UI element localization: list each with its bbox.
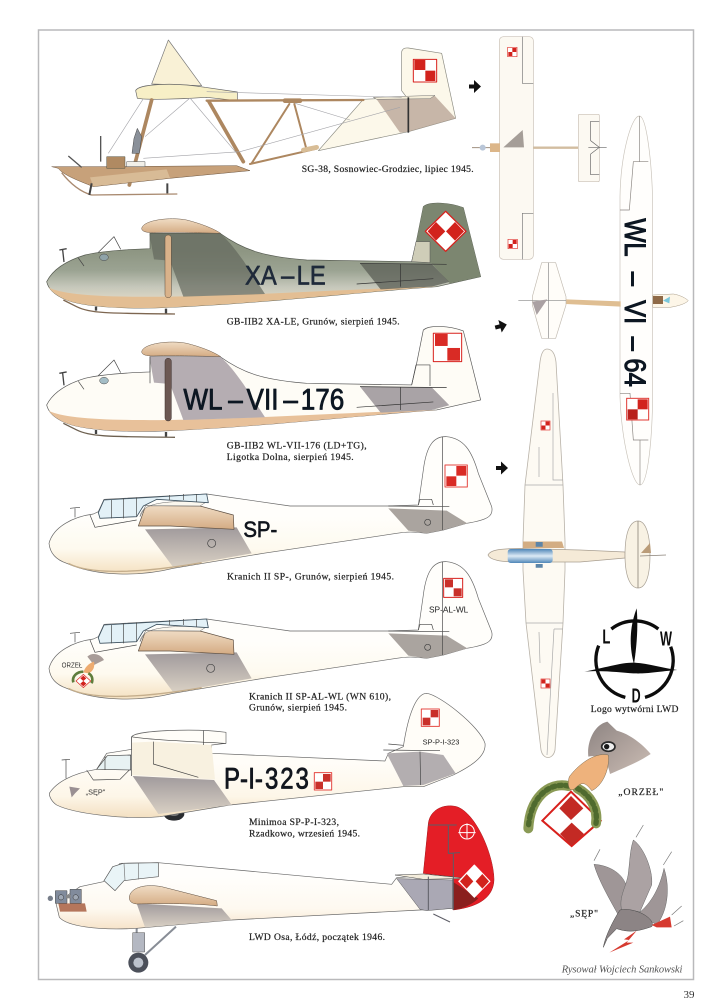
registration: 323 [265, 761, 309, 795]
tailplane [625, 521, 650, 588]
aircraft: SG-38 side view [52, 40, 456, 195]
engine [48, 889, 81, 903]
nose emblem ORZEŁ: ORZEŁ [62, 661, 82, 670]
shadow under wing [137, 903, 232, 927]
fuselage [56, 863, 453, 929]
wing strut [165, 235, 171, 298]
credit: Rysował Wojciech Sankowski [561, 965, 682, 976]
tailplane [518, 263, 566, 338]
arrow 2 [494, 318, 508, 334]
canopy [97, 755, 131, 770]
caption: Kranich II SP-AL-WL: Grunów, sierpień 1945. [249, 703, 347, 714]
plan view: SG-38 [472, 37, 607, 259]
roundel lower [541, 679, 550, 688]
keel [68, 563, 202, 571]
cockpit [653, 296, 670, 304]
registration: – [619, 272, 652, 287]
tail shadow [360, 387, 449, 413]
logo: LWD: W [660, 629, 672, 651]
rudder [638, 521, 666, 588]
fin registration: SP-P-I-323 [423, 738, 459, 747]
canopy [104, 863, 158, 891]
registration: 64 [619, 358, 652, 387]
caption: Minimoa SP-P-I-323 [249, 817, 360, 840]
wing top [132, 742, 215, 779]
registration: SP- [243, 517, 277, 542]
landing gear [128, 910, 176, 973]
roundel upper [541, 421, 550, 430]
roundels [508, 47, 517, 249]
registration: – [228, 383, 243, 416]
registration: – [619, 337, 652, 352]
roundel on fin [413, 59, 437, 82]
wing [620, 116, 653, 485]
aircraft: Minimoa SP-P-I-323 [49, 693, 485, 821]
aircraft: Kranich II SP-AL-WL [49, 562, 492, 699]
nose [472, 143, 500, 152]
wing root [138, 506, 234, 529]
body and head [603, 909, 652, 947]
plan view: Kranich II [488, 349, 666, 758]
pylon [152, 40, 202, 86]
aileron lines [620, 116, 648, 485]
roundel diamond [459, 865, 490, 897]
wreath [528, 785, 596, 828]
caption: GB-IIB2 XA-LE: GB-IIB2 XA-LE, Grunów, sierpień 1945. [227, 316, 400, 328]
nose emblem ORZEŁ [62, 654, 104, 688]
fuselage [488, 548, 625, 562]
arrow 3 [496, 462, 508, 474]
canopy frames [124, 863, 138, 881]
shadow under wing [145, 527, 252, 567]
caption: GB-IIB2 WL-VII-176: GB-IIB2 WL-VII-176 (LD+TG), [227, 440, 367, 451]
fuselage and fin [49, 437, 492, 574]
fin upper colour [412, 203, 481, 283]
shadow under wing [145, 652, 252, 692]
caption: GB-IIB2 WL-VII-176 [227, 440, 367, 463]
tail shadow [387, 752, 456, 786]
shadow under wing [133, 776, 232, 814]
registration: WL [619, 218, 652, 257]
caption: GB-IIB2 WL-VII-176: Ligotka Dolna, sierpień 1945. [227, 452, 354, 463]
wheel [164, 807, 184, 821]
beak [568, 755, 609, 791]
caption: LWD Osa: LWD Osa, Łódź, początek 1946. [249, 932, 385, 943]
caption: SĘP: „SĘP" [570, 909, 598, 920]
wing section [136, 84, 237, 101]
fin roundel [421, 709, 439, 726]
plan view: GB-IIB2 WL-VI-64 [518, 116, 688, 485]
right wing [638, 868, 667, 925]
fuselage beams and struts [129, 100, 363, 185]
wing root [129, 886, 217, 906]
tail shadow [388, 633, 467, 658]
hinge [428, 825, 460, 922]
horizontal blade [584, 663, 677, 673]
fuselage and fin [47, 203, 481, 308]
dark red rudder underside [453, 882, 478, 910]
window [100, 377, 108, 384]
canopy frames and details [70, 437, 449, 530]
registration: WL [183, 383, 222, 416]
vertical blade [631, 608, 637, 664]
belly [49, 410, 437, 431]
aircraft: Kranich II SP- [49, 437, 492, 574]
hull and skid [52, 128, 250, 195]
fuselage boom [566, 299, 621, 307]
roundel [433, 333, 462, 362]
motion lines [594, 825, 683, 926]
wing centre tan [523, 542, 564, 548]
emblem: ORZEŁ [528, 722, 651, 846]
wing root [138, 631, 234, 654]
fuselage and fin [49, 693, 485, 818]
window [100, 254, 108, 261]
registration: XA [245, 261, 277, 291]
tailplane [578, 114, 607, 182]
fuselage and fin [49, 562, 492, 699]
caption: Kranich II SP-AL-WL [249, 691, 391, 714]
fin light panel [412, 242, 430, 263]
logo: LWD [584, 608, 677, 707]
letters: L [602, 626, 610, 648]
registration: LE [297, 261, 326, 291]
wing strut [165, 358, 171, 421]
wing top fairing [140, 501, 207, 517]
left wing [594, 864, 630, 915]
eye [602, 742, 615, 751]
fuselage and fin [47, 326, 481, 431]
tail shadow [388, 508, 467, 533]
fin registration: SP-AL-WL [429, 605, 469, 615]
nose emblem SEP [69, 787, 106, 797]
wing [523, 349, 565, 758]
tail shadow [360, 263, 449, 289]
wing root [142, 342, 221, 357]
head [588, 722, 651, 774]
wing spoilers [536, 542, 543, 568]
aircraft: GB-IIB2 WL-VII-176 [47, 326, 481, 437]
tail shadow [397, 879, 453, 911]
aircraft: GB-IIB2 XA-LE [47, 203, 481, 314]
keel [68, 688, 202, 696]
roundel [444, 578, 463, 597]
tail shadow [641, 543, 651, 553]
canopy [508, 549, 553, 563]
caption: ORZEŁ: „ORZEŁ" [618, 787, 663, 798]
caption: Minimoa SP-P-I-323: Minimoa SP-P-I-323, [249, 817, 339, 828]
registration: – [283, 383, 298, 416]
rigging wires [108, 92, 402, 158]
hatch circles [208, 519, 431, 547]
pylon shadow [503, 130, 524, 147]
registration: I [248, 761, 255, 795]
shadow under wing [149, 357, 265, 420]
fuselage roundel [314, 773, 332, 790]
pupil [604, 744, 609, 749]
wing top fairing [140, 626, 207, 642]
nose brown patch [58, 903, 87, 912]
nose emblem SEP: „SĘP" [86, 787, 106, 796]
roundel diamond [425, 211, 466, 251]
canopy [98, 494, 208, 518]
registration: - [255, 761, 263, 795]
shield [542, 792, 601, 846]
caption: Minimoa SP-P-I-323: Rzadkowo, wrzesień 1945. [249, 829, 360, 840]
canopy frames and details [70, 562, 449, 655]
tailplane and hinge lines [395, 874, 467, 879]
emblem: SĘP [594, 825, 683, 953]
caption: Kranich II SP-: Kranich II SP-, Grunów, sierpień 1945. [227, 572, 394, 583]
middle wing [621, 840, 652, 912]
tail fabric and fin [318, 48, 456, 151]
canopy, pitot, details [59, 237, 447, 314]
arrow 1 [469, 80, 481, 93]
tail boom [533, 144, 578, 151]
logo: LWD: D [632, 685, 641, 707]
caption: logo: Logo wytwórni LWD [591, 704, 678, 715]
registration: P [224, 761, 240, 795]
registration: – [281, 261, 295, 291]
ailerons [522, 37, 533, 259]
hatch circles [207, 644, 431, 672]
shadow under wing [149, 233, 265, 297]
lines and details [62, 731, 440, 785]
belly [49, 287, 437, 308]
canopy [98, 619, 208, 643]
roundel [627, 398, 649, 420]
nose [653, 294, 688, 307]
registration: VI [619, 300, 652, 324]
red rudder [423, 806, 494, 910]
roundel [445, 465, 467, 487]
LWD emblem on rudder [458, 823, 476, 839]
registration: 176 [301, 383, 344, 416]
wing [499, 37, 533, 259]
caption: SG-38: SG-38, Sosnowiec-Grodziec, lipiec 1945. [302, 164, 474, 175]
caption: Kranich II SP-AL-WL: Kranich II SP-AL-WL (WN 610), [249, 691, 391, 702]
ring arcs [596, 621, 673, 697]
registration: - [240, 761, 248, 795]
wing panel lines [525, 393, 563, 755]
canopy, pitot, details [59, 357, 447, 437]
aircraft: LWD Osa [48, 806, 494, 973]
registration: VII [247, 383, 278, 416]
tail and lightning [609, 917, 672, 953]
wing root [142, 219, 221, 233]
